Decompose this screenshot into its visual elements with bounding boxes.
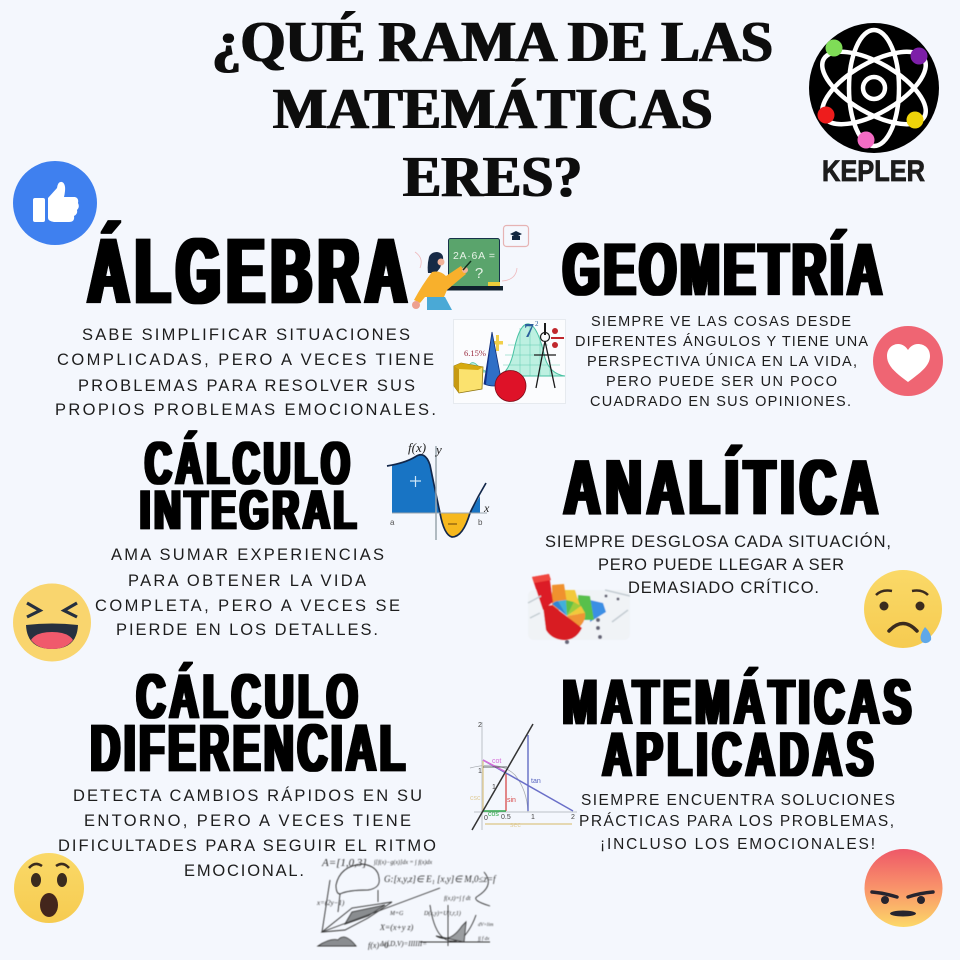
illustration: geometry shapes: 7 <box>524 320 534 342</box>
icon: wow reaction <box>14 853 84 923</box>
chart: definite integral: y <box>434 442 442 457</box>
diagram: trigonometric functions on unit circle: 0.5 <box>501 814 511 821</box>
illustration: geometry shapes <box>454 320 566 404</box>
title: ¿QUÉ RAMA DE LAS <box>212 9 773 74</box>
heading: Matemáticas Aplicadas: MATEMÁTICAS <box>562 667 911 738</box>
text: Geometría description: PERSPECTIVA ÚNICA EN LA VIDA, <box>587 353 857 370</box>
text: Cálculo Diferencial description: EMOCIONAL. <box>184 862 304 880</box>
illustration: handwritten calculus formulas: X=(x+y z) <box>379 923 414 932</box>
heading: Matemáticas Aplicadas: APLICADAS <box>602 720 873 790</box>
icon: teacher at blackboard: 2A·6A = <box>453 250 495 262</box>
logo: Kepler atom <box>809 23 939 188</box>
text: Geometría description: PERO PUEDE SER UN POCO <box>606 374 837 390</box>
diagram: trigonometric functions on unit circle: cot <box>492 758 501 765</box>
illustration: geometry shapes: 2 <box>535 320 539 328</box>
chart: definite integral: b <box>478 518 483 527</box>
logo: Kepler atom: KEPLER <box>822 155 925 188</box>
heading: Cálculo Diferencial: CÁLCULO <box>136 661 358 732</box>
diagram: trigonometric functions on unit circle: sin <box>507 797 516 804</box>
illustration: handwritten calculus formulas: f(x)=0 <box>368 941 388 950</box>
text: Álgebra description <box>55 326 436 419</box>
icon: love reaction <box>873 326 943 396</box>
illustration: 3D pie and bar chart <box>528 574 630 644</box>
title: ERES? <box>403 146 582 209</box>
heading: Analítica: ANALÍTICA <box>564 444 878 531</box>
heading: Matemáticas Aplicadas <box>562 667 911 790</box>
text: Cálculo Diferencial description: ENTORNO, PERO A VECES TIENE <box>84 812 411 830</box>
diagram: trigonometric functions on unit circle: tan <box>531 778 541 785</box>
text: Cálculo Integral description <box>95 546 400 639</box>
text: Matemáticas Aplicadas description <box>579 792 895 853</box>
text: Analítica description: DEMASIADO CRÍTICO. <box>628 578 819 597</box>
text: Analítica description <box>545 532 891 597</box>
illustration: geometry shapes: 6.15% <box>464 348 486 358</box>
diagram: trigonometric functions on unit circle: 1 <box>478 768 482 775</box>
text: Geometría description: CUADRADO EN SUS OPINIONES. <box>590 394 851 410</box>
diagram: trigonometric functions on unit circle: 1 <box>531 814 535 821</box>
heading: Cálculo Integral: INTEGRAL <box>140 479 356 542</box>
text: Cálculo Diferencial description: DIFICULTADES PARA SEGUIR EL RITMO <box>58 837 436 855</box>
text: Matemáticas Aplicadas description: SIEMPRE ENCUENTRA SOLUCIONES <box>581 792 895 809</box>
chart: definite integral: x <box>483 501 490 515</box>
illustration: handwritten calculus formulas: ∫[f(x)−g(x)]dx = ∫ f(x)dx <box>373 859 433 866</box>
text: Álgebra description: SABE SIMPLIFICAR SITUACIONES <box>82 326 410 344</box>
text: Álgebra description: COMPLICADAS, PERO A VECES TIENE <box>57 351 434 369</box>
text: Geometría description: DIFERENTES ÁNGULOS Y TIENE UNA <box>575 333 868 350</box>
illustration: handwritten calculus formulas: dV=lim <box>478 923 494 928</box>
icon: laugh reaction <box>13 584 91 662</box>
icon: teacher at blackboard: ? <box>475 265 483 282</box>
diagram: trigonometric functions on unit circle: sec <box>510 822 521 829</box>
text: Geometría description <box>575 314 868 410</box>
heading: Cálculo Integral <box>140 430 356 542</box>
heading: Geometría: GEOMETRÍA <box>563 228 882 312</box>
chart: definite integral: a <box>390 518 395 527</box>
text: Álgebra description: PROPIOS PROBLEMAS EMOCIONALES. <box>55 401 436 419</box>
diagram: trigonometric functions on unit circle: 2 <box>571 814 575 821</box>
chart: definite integral <box>387 440 490 540</box>
text: Álgebra description: PROBLEMAS PARA RESOLVER SUS <box>78 377 415 395</box>
diagram: trigonometric functions on unit circle: cos <box>488 811 499 818</box>
title <box>212 9 773 209</box>
text: Geometría description: SIEMPRE VE LAS COSAS DESDE <box>591 314 851 330</box>
heading: Cálculo Integral: CÁLCULO <box>145 430 350 497</box>
heading: Cálculo Diferencial <box>90 661 405 785</box>
illustration: handwritten calculus formulas: M=G <box>389 911 404 917</box>
text: Cálculo Integral description: PIERDE EN LOS DETALLES. <box>116 621 378 639</box>
text: Matemáticas Aplicadas description: ¡INCLUSO LOS EMOCIONALES! <box>600 836 875 853</box>
icon: sad reaction <box>864 570 942 648</box>
illustration: handwritten calculus formulas: G:[x,y,z]∈ E₁ [x,y]∈ M,0≤z=f <box>384 874 497 884</box>
diagram: trigonometric functions on unit circle: 2 <box>478 722 482 729</box>
diagram: trigonometric functions on unit circle: csc <box>470 795 481 802</box>
illustration: handwritten calculus formulas: x=(2y−1) <box>316 899 345 907</box>
illustration: handwritten calculus formulas: D(x,y)=U(t,r,1) <box>423 910 461 917</box>
illustration: handwritten calculus formulas: Δ(f,D,V)=IIIIII= <box>379 940 427 948</box>
text: Cálculo Diferencial description <box>58 786 436 880</box>
text: Cálculo Integral description: PARA OBTENER LA VIDA <box>128 572 366 590</box>
heading: Álgebra: ÁLGEBRA <box>88 218 406 324</box>
diagram: trigonometric functions on unit circle <box>470 722 577 830</box>
text: Analítica description: PERO PUEDE LLEGAR A SER <box>598 556 844 574</box>
icon: angry reaction <box>864 849 942 927</box>
text: Cálculo Integral description: COMPLETA, PERO A VECES SE <box>95 597 400 615</box>
illustration: handwritten calculus formulas: ∫∫ f dx <box>477 936 490 942</box>
text: Analítica description: SIEMPRE DESGLOSA CADA SITUACIÓN, <box>545 532 891 551</box>
icon: teacher at blackboard <box>412 226 528 310</box>
title: MATEMÁTICAS <box>273 78 713 141</box>
text: Cálculo Diferencial description: DETECTA CAMBIOS RÁPIDOS EN SU <box>73 786 422 805</box>
text: Cálculo Integral description: AMA SUMAR EXPERIENCIAS <box>111 546 384 564</box>
illustration: handwritten calculus formulas: f(x,t)=∫ f dt <box>444 895 471 902</box>
chart: definite integral: f(x) <box>408 440 426 455</box>
text: Matemáticas Aplicadas description: PRÁCTICAS PARA LOS PROBLEMAS, <box>579 813 894 830</box>
icon: like reaction <box>13 161 97 245</box>
diagram: trigonometric functions on unit circle: 0 <box>484 815 488 822</box>
illustration: handwritten calculus formulas <box>316 857 497 950</box>
heading: Cálculo Diferencial: DIFERENCIAL <box>90 711 405 785</box>
illustration: handwritten calculus formulas: A=[1,0,3] <box>321 857 367 869</box>
diagram: trigonometric functions on unit circle: 1 <box>492 784 496 791</box>
